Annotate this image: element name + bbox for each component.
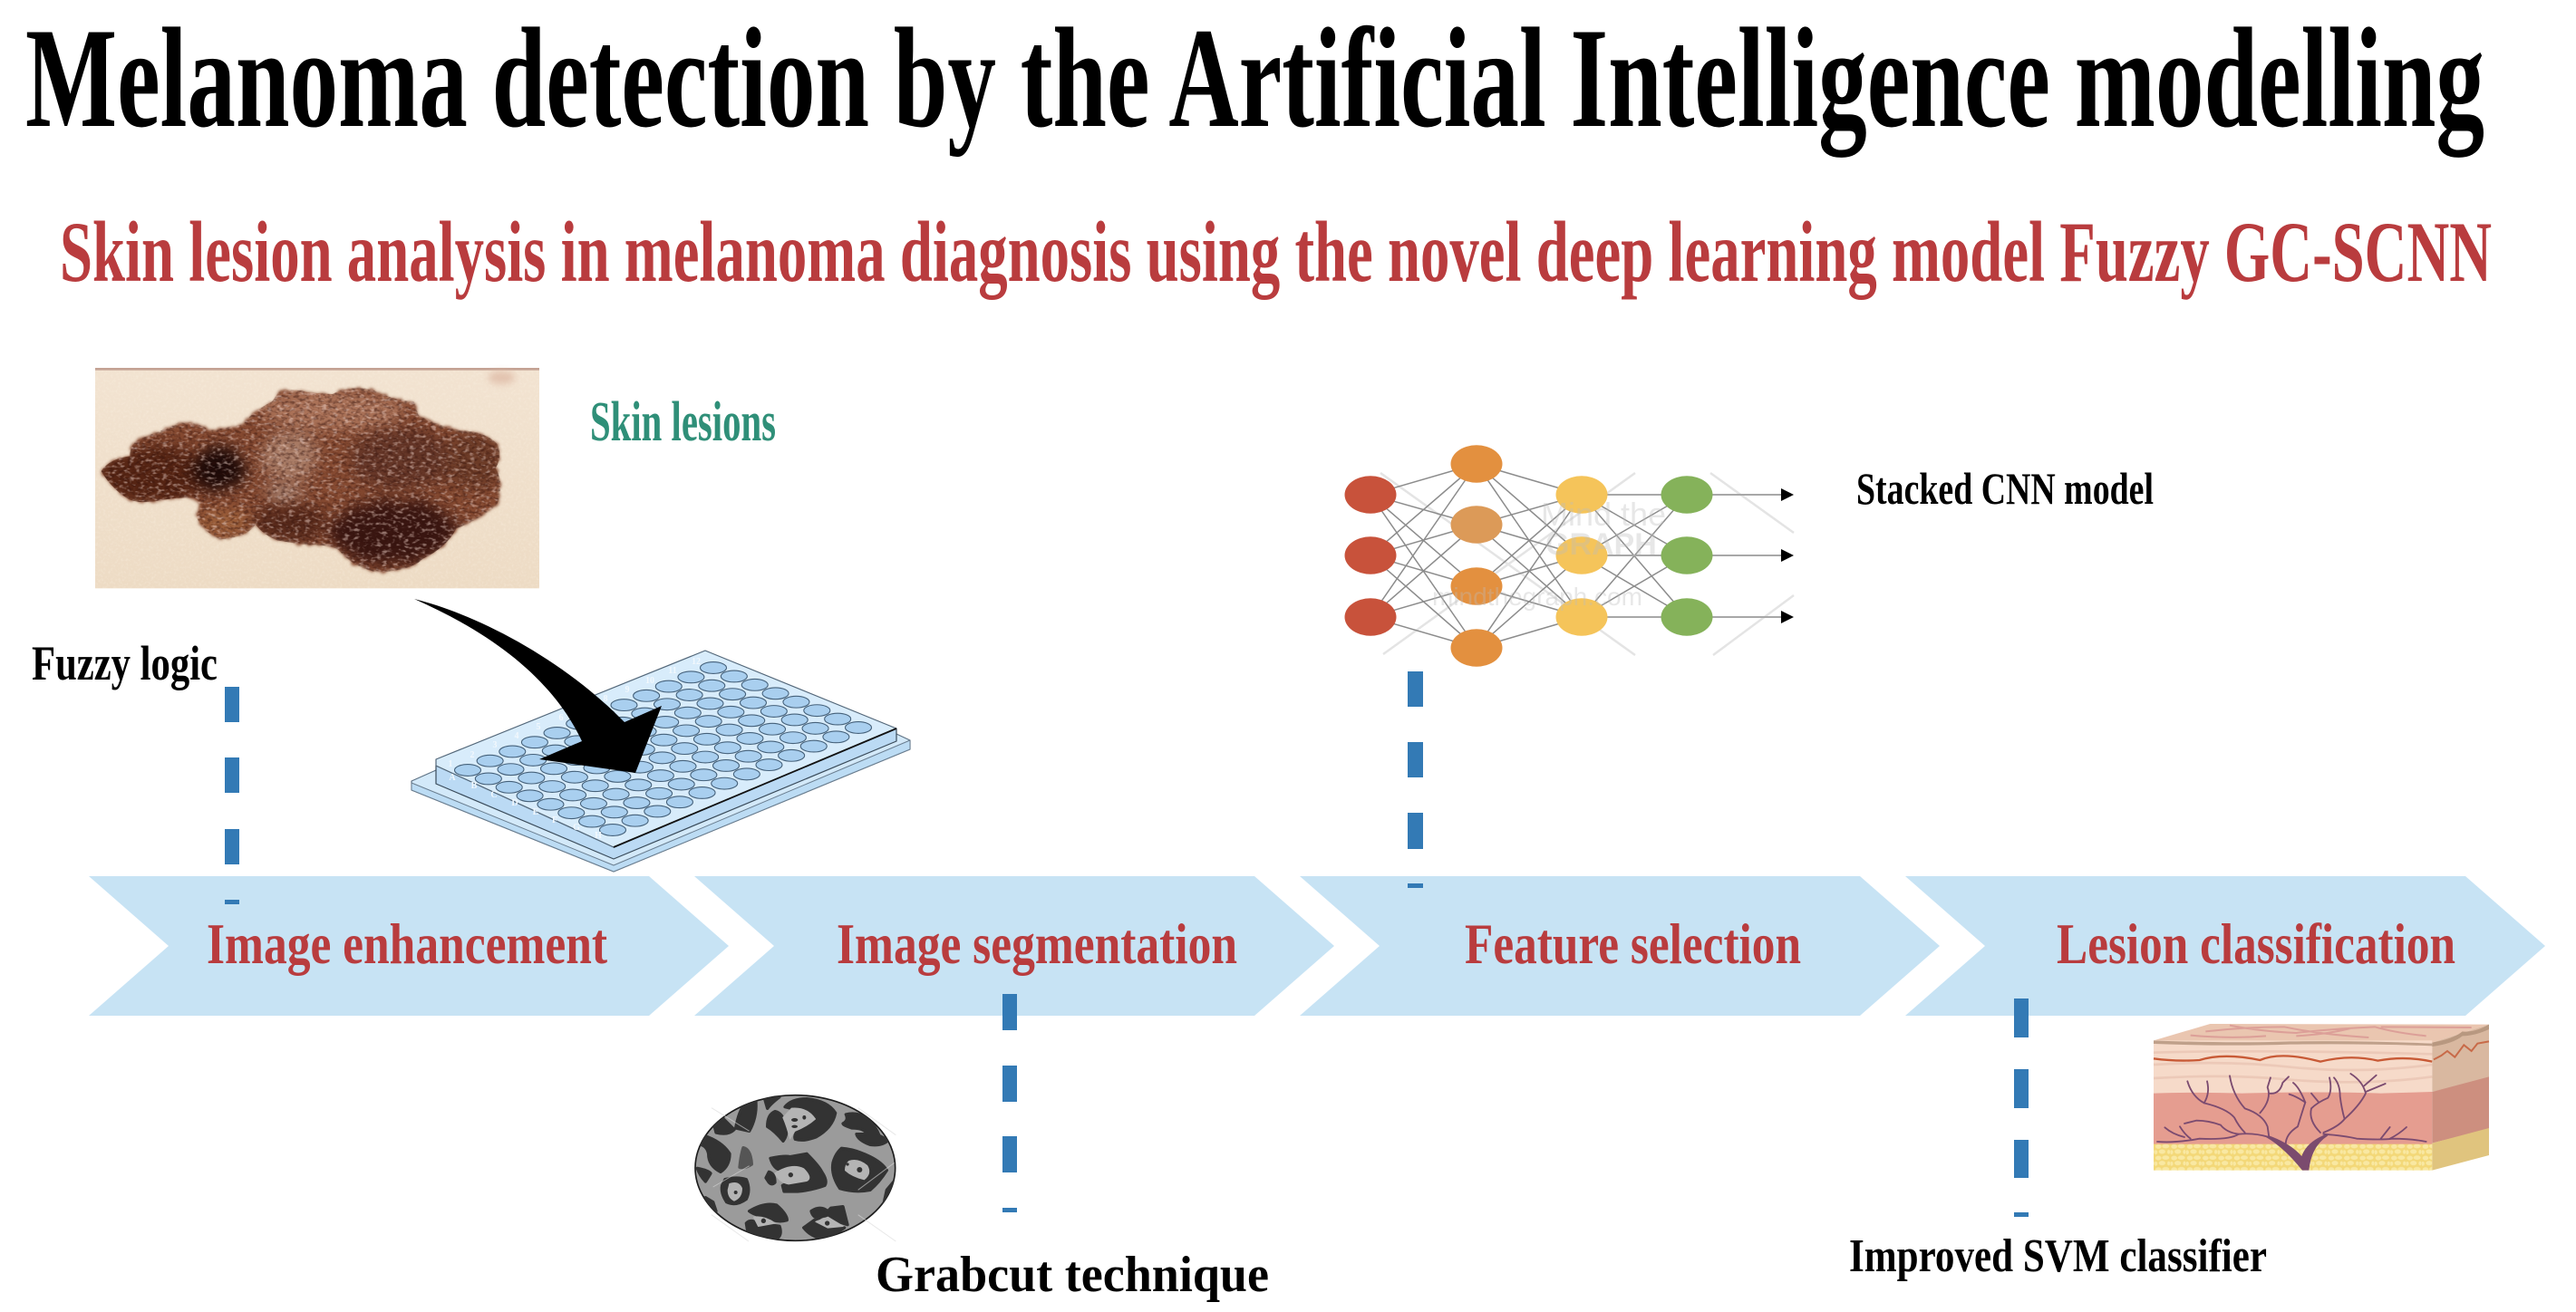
chevron: lesion classification [1905, 876, 2545, 1016]
process chevrons [89, 876, 2545, 1016]
watermark: GRAPH [1545, 527, 1657, 562]
hidden layer 2 [1555, 476, 1608, 636]
icon: 96-well plate: 2 [470, 750, 475, 760]
icon: 96-well plate: 11 [668, 666, 677, 676]
icon: 96-well plate: D [511, 798, 518, 808]
side face [2432, 1025, 2489, 1092]
icon: 96-well plate: G [573, 823, 580, 833]
icon: segmented lesion disc [695, 1095, 896, 1241]
arrowheads [1781, 488, 1794, 623]
watermark [1432, 496, 1666, 611]
label: stacked CNN model: Stacked CNN model [1856, 463, 2154, 514]
red wave [2154, 1056, 2432, 1062]
diagram: stacked CNN neural network [1345, 445, 1794, 667]
dashed connector: lesion classification [2014, 998, 2029, 1217]
icon: 96-well plate: 4 [515, 731, 518, 741]
chevron: feature selection [1300, 876, 1940, 1016]
icon: 96-well plate: 3 [493, 740, 497, 750]
hidden layer 1 [1450, 445, 1503, 667]
watermark: mindthegraph.com [1432, 583, 1642, 611]
dashed connector: image segmentation [1002, 994, 1017, 1212]
step label: image segmentation: Image segmentation [837, 912, 1237, 976]
label: grabcut technique: Grabcut technique [876, 1247, 1269, 1303]
output layer [1661, 476, 1713, 636]
icon: 96-well plate: H [595, 831, 602, 841]
label: improved SVM classifier: Improved SVM classifier [1849, 1230, 2267, 1282]
icon: 96-well plate: 8 [604, 694, 607, 704]
blood vessels [2157, 1074, 2426, 1144]
top surface [2154, 1024, 2489, 1043]
chevron: image segmentation [694, 876, 1334, 1016]
icon: 96-well plate: F [552, 815, 557, 825]
arrow: lesion photo to plate [414, 599, 662, 773]
label: skin lesions: Skin lesions [590, 391, 776, 453]
icon: 96-well plate: C [490, 790, 498, 800]
icon: 96-well plate: 10 [645, 676, 654, 686]
icon: 96-well plate [412, 651, 910, 872]
input layer [1345, 476, 1396, 636]
step label: lesion classification: Lesion classification [2057, 912, 2455, 976]
icon: 96-well plate: 7 [580, 704, 586, 714]
step label: feature selection: Feature selection [1465, 912, 1801, 976]
icon: 96-well plate: 1 [448, 759, 453, 769]
fat layer [2154, 1144, 2432, 1171]
icon: 96-well plate: B [471, 781, 478, 791]
icon: 96-well plate: 9 [625, 685, 629, 695]
photo: skin lesion [95, 368, 539, 588]
dermis [2154, 1092, 2432, 1144]
watermark: Mind the [1541, 496, 1666, 533]
icon: skin cross-section [2154, 1024, 2489, 1171]
icon: 96-well plate: A [449, 773, 456, 783]
epidermis [2154, 1040, 2432, 1094]
chevron: image enhancement [89, 876, 729, 1016]
icon: 96-well plate: 6 [558, 713, 564, 723]
dashed connector: feature selection [1408, 671, 1423, 888]
icon: 96-well plate: 5 [537, 722, 540, 732]
step label: image enhancement: Image enhancement [207, 912, 607, 976]
icon: 96-well plate: 12 [692, 657, 701, 667]
icon: 96-well plate: E [533, 807, 539, 817]
dashed connector: fuzzy logic [225, 687, 239, 904]
label: fuzzy logic: Fuzzy logic [32, 636, 218, 690]
